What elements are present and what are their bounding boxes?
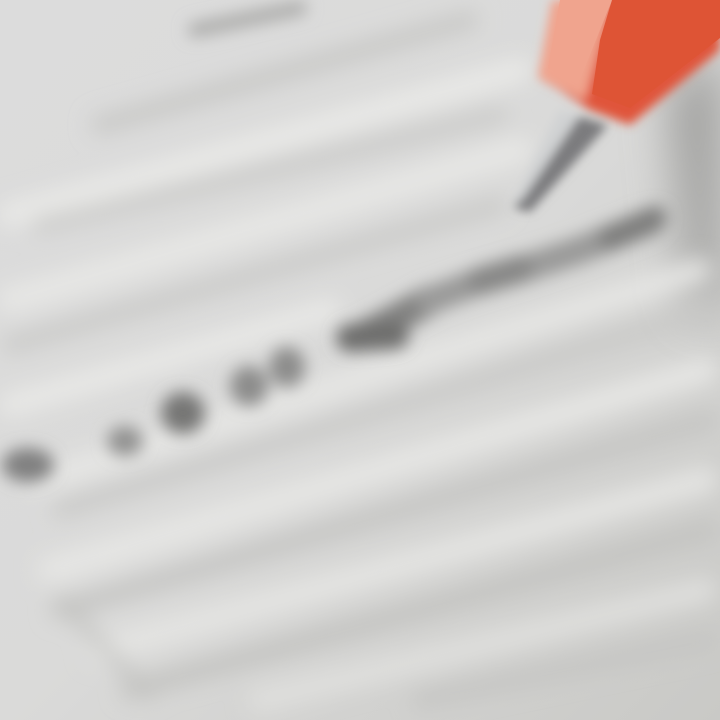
dot marks — [2, 347, 305, 482]
shaded paper edge on the right — [670, 50, 720, 320]
pen — [512, 0, 720, 212]
pen body — [538, 0, 720, 125]
pen tip — [512, 110, 608, 212]
smudge at top of page — [195, 8, 300, 30]
handwritten marks on the paper — [2, 218, 655, 482]
signature stroke — [350, 218, 655, 338]
